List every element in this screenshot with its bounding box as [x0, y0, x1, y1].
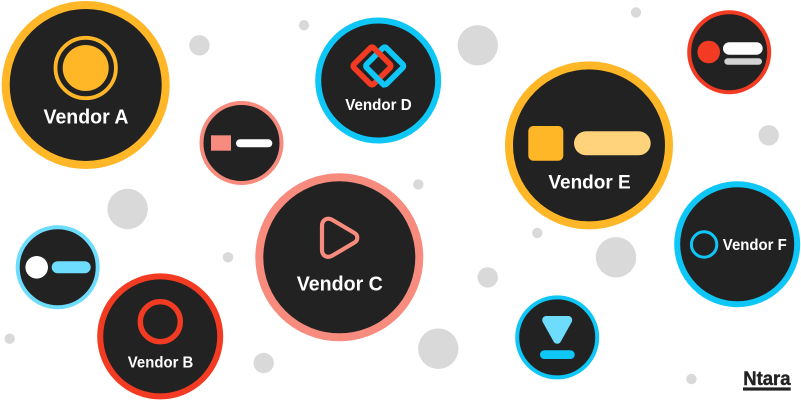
label: Vendor B: Vendor B	[128, 355, 193, 372]
label: Vendor C: Vendor C	[297, 274, 383, 296]
panel: Vendor B	[100, 276, 220, 396]
icon: white disc	[25, 256, 48, 279]
icon: ring with disc	[55, 38, 116, 98]
icon: interlocked diamonds	[352, 46, 404, 86]
icon: pale bar	[574, 131, 651, 155]
icon: bar	[540, 350, 575, 359]
panel: Vendor E	[509, 65, 669, 225]
panel: light blue toggle bubble	[18, 227, 98, 307]
panel: Vendor D	[318, 20, 438, 140]
icon: rounded square	[528, 126, 563, 161]
icon: white bar	[236, 139, 272, 147]
logo: Ntara: Ntara	[743, 368, 791, 390]
label: Vendor A: Vendor A	[44, 106, 128, 128]
panel: Vendor A	[6, 5, 166, 165]
icon: square	[211, 135, 231, 151]
icon: ring	[691, 232, 717, 257]
panel: Vendor F	[677, 184, 797, 304]
icon: red disc	[697, 41, 720, 63]
panel: Vendor C	[259, 177, 419, 337]
icon: play triangle	[322, 219, 357, 257]
panel: salmon square and bar bubble	[202, 103, 282, 183]
label: Vendor D: Vendor D	[345, 97, 412, 114]
icon: triangle	[546, 320, 568, 340]
icon: grey bar	[724, 58, 762, 65]
icon: white bar	[723, 42, 763, 55]
label: Vendor F: Vendor F	[723, 237, 787, 254]
panel: download bubble	[517, 297, 597, 377]
label: Vendor E: Vendor E	[548, 171, 631, 193]
icon: blue bar	[52, 261, 91, 273]
icon: ring	[140, 302, 180, 342]
panel: red disc and bars bubble	[689, 12, 769, 92]
